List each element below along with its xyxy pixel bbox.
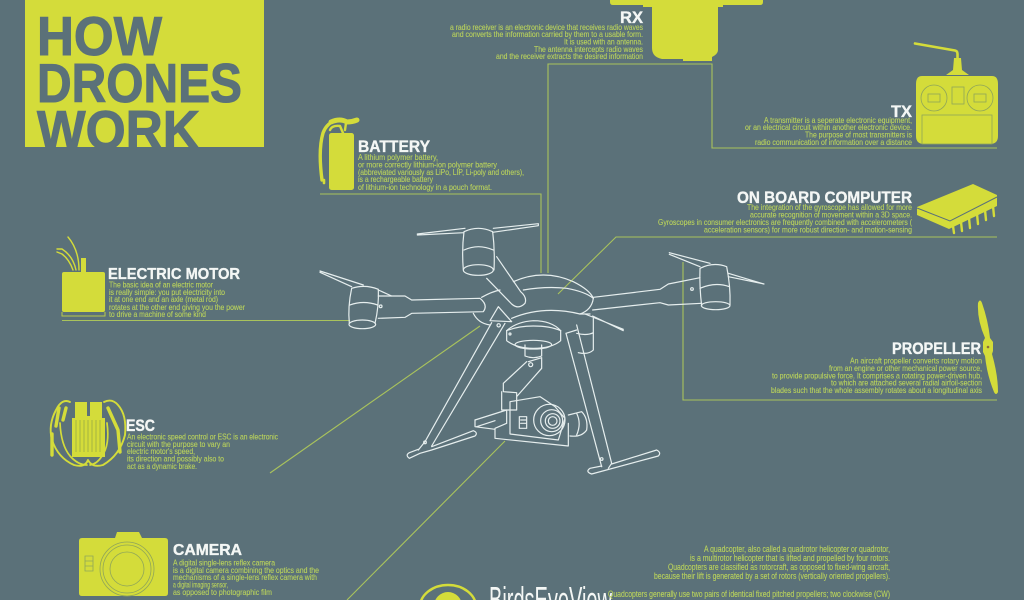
battery text block: A lithium polymer battery, — [358, 153, 438, 162]
gimbal arm — [502, 358, 542, 410]
front right rotor — [577, 314, 623, 353]
quadcopter text block: A quadcopter, also called a quadrotor helicopter or quadrotor, — [704, 544, 890, 554]
quadcopter text block: is a multirotor helicopter that is lifted and propelled by four rotors. — [690, 553, 890, 563]
on board computer text block: ON BOARD COMPUTER — [737, 188, 912, 207]
RX text block — [450, 8, 644, 61]
rear arm — [487, 257, 526, 307]
title block: HOW — [37, 6, 163, 67]
camera text block — [173, 542, 319, 597]
left rotor and arm — [320, 271, 485, 329]
quadcopter text block — [608, 544, 890, 599]
logo: BirdsEyeView — [420, 579, 613, 600]
TX text block: TX — [891, 102, 913, 121]
title block: WORK — [37, 100, 200, 161]
on board computer text block: acceleration sensors) for more robust direction- and motion-sensing — [704, 226, 912, 234]
left landing gear — [407, 307, 512, 458]
TX text block: A transmitter is a seperate electronic equipment, — [764, 116, 912, 125]
ESC text block: electric motor's speed, — [127, 447, 195, 456]
icon: battery — [320, 120, 357, 190]
electric motor text block: is really simple: you put electricity into — [109, 288, 225, 297]
ESC text block: act as a dynamic brake. — [127, 462, 197, 471]
RX text block: and converts the information carried by them to a usable form. — [452, 30, 643, 39]
quadcopter text block: because their lift is generated by a set of rotors (vertically oriented propellers). — [654, 571, 890, 581]
RX text block: and the receiver extracts the desired information — [496, 52, 643, 61]
gimbal mount — [507, 321, 561, 358]
camera text block: a digital imaging sensor, — [173, 580, 228, 590]
TX text block — [745, 102, 913, 147]
drone illustration — [320, 224, 764, 474]
camera text block: mechanisms of a single-lens reflex camera with — [173, 573, 317, 582]
electric motor text block: to drive a machine of some kind — [109, 310, 206, 319]
right rotor and arm — [593, 253, 764, 310]
battery text block: or more correctly lithium-ion polymer battery — [358, 160, 497, 170]
RX text block: It is used with an antenna. — [564, 38, 643, 46]
battery text block: BATTERY — [358, 138, 430, 156]
electric motor text block — [108, 266, 245, 319]
camera text block: A digital single-lens reflex camera — [173, 558, 275, 568]
electric motor text block: rotates at the other end giving you the power — [109, 303, 245, 312]
camera text block: as opposed to photographic film — [173, 588, 272, 597]
icon: electric motor — [57, 237, 105, 316]
TX text block: radio communication of information over a distance — [755, 138, 912, 147]
icon: TX transmitter — [915, 44, 998, 144]
title block — [25, 0, 264, 161]
TX text block: The purpose of most transmitters is — [805, 130, 912, 140]
propeller text block — [771, 340, 982, 395]
body shell — [473, 275, 593, 325]
electric motor text block: The basic idea of an electric motor — [109, 280, 213, 290]
camera text block: is a digital camera combining the optics and the — [173, 566, 319, 575]
ESC text block: circuit with the purpose to vary an — [127, 440, 230, 449]
on board computer text block: The integration of the gyroscope has allowed for more — [747, 203, 912, 212]
camera on gimbal — [475, 397, 587, 446]
icon: on board computer chip — [917, 184, 997, 233]
electric motor text block: ELECTRIC MOTOR — [108, 266, 240, 283]
on board computer text block — [658, 188, 912, 234]
ESC text block — [126, 417, 278, 471]
ESC text block: ESC — [126, 417, 155, 435]
propeller text block: to provide propulsive force. It comprises a rotating power-driven hub, — [772, 372, 982, 380]
propeller text block: An aircraft propeller converts rotary motion — [850, 356, 982, 366]
icon: propeller — [978, 300, 998, 394]
title block: DRONES — [37, 53, 242, 114]
electric motor text block: it at one end and an axle (metal rod) — [109, 295, 218, 304]
propeller text block: PROPELLER — [892, 340, 981, 358]
on board computer text block: Gyroscopes in consumer electronics are frequently combined with accelerometers ( — [658, 218, 912, 227]
camera text block: CAMERA — [173, 542, 242, 559]
battery text block: (abbreviated variously as LiPo, LIP, Li-poly and others), — [358, 168, 524, 177]
RX text block: RX — [620, 8, 644, 27]
battery text block: is a rechargeable battery — [358, 175, 433, 184]
ESC text block: An electronic speed control or ESC is an electronic — [127, 432, 278, 442]
quadcopter text block: Quadcopters generally use two pairs of identical fixed pitched propellers; two clockwise (CW) — [608, 589, 890, 599]
right landing gear — [566, 325, 660, 474]
quadcopter text block: Quadcopters are classified as rotorcraft, as opposed to fixed-wing aircraft, — [668, 562, 890, 572]
propeller text block: from an engine or other mechanical power source, — [829, 364, 982, 373]
icon: ESC — [51, 401, 125, 466]
propeller text block: to which are attached several radial airfoil-section — [831, 378, 982, 388]
on board computer text block: accurate recognition of movement within a 3D space. — [750, 210, 912, 220]
icon: camera — [79, 532, 168, 596]
icon: RX receiver — [610, 0, 763, 61]
battery text block: of lithium-ion technology in a pouch format. — [358, 183, 492, 192]
ESC text block: its direction and possibly also to — [127, 454, 224, 464]
battery text block — [358, 138, 524, 192]
rear rotor — [417, 224, 538, 275]
propeller text block: blades such that the whole assembly rotates about a longitudinal axis — [771, 386, 982, 395]
RX text block: The antenna intercepts radio waves — [534, 45, 643, 54]
RX text block: a radio receiver is an electronic device that receives radio waves — [450, 23, 643, 32]
TX text block: or an electrical circuit within another electronic device. — [745, 123, 912, 132]
